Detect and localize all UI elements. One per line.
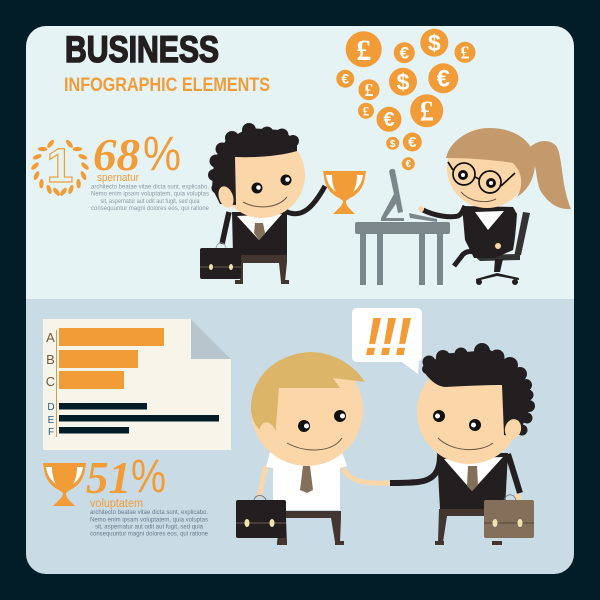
- money coins: €: [383, 109, 395, 131]
- text block: bottom paragraph: architecto beatae vitae dicta sunt, explicabo.: [90, 509, 208, 516]
- money coins: £: [363, 104, 370, 118]
- money coins: €: [437, 66, 450, 92]
- face: [447, 128, 527, 208]
- chair: [514, 212, 530, 257]
- text block: bottom paragraph: [90, 509, 208, 538]
- title: BUSINESS: [65, 29, 219, 70]
- money coins: $: [390, 139, 396, 150]
- panel: bottom blue card: [26, 299, 574, 574]
- mouth: [461, 192, 496, 202]
- category labels: C: [46, 374, 55, 389]
- briefcase: [254, 496, 266, 500]
- bar chart on paper: [43, 319, 231, 450]
- icon: trophy bottom: [43, 463, 86, 506]
- subtitle: INFOGRAPHIC ELEMENTS: [64, 75, 270, 96]
- speech bubble: [352, 307, 422, 374]
- tie: [254, 223, 265, 240]
- eyes: [298, 420, 310, 432]
- trousers: [277, 511, 341, 542]
- stat: 68 percent: %: [143, 128, 181, 181]
- trousers: [240, 255, 287, 282]
- ear: [503, 417, 523, 441]
- icon: laurel wreath with number one: [30, 139, 90, 197]
- money coins: €: [408, 134, 417, 151]
- leg: [454, 251, 484, 266]
- hand and briefcase: [216, 243, 226, 248]
- raised arm: [285, 186, 325, 214]
- typing arm: [423, 206, 465, 217]
- money coins: €: [406, 159, 412, 170]
- bar chart on paper: F: [48, 427, 54, 438]
- trousers: [438, 509, 505, 542]
- text block: top paragraph: Nemo enim ipsam voluptatem, quia voluptas: [91, 191, 209, 198]
- glasses: [448, 162, 515, 193]
- shirt: [444, 457, 503, 491]
- money coins: $: [428, 30, 441, 56]
- mouth: [287, 438, 342, 450]
- label: spernatur: spernatur: [97, 172, 139, 184]
- money coins: £: [420, 96, 434, 128]
- text block: top paragraph: architecto beatae vitae dicta sunt, explicabo.: [91, 184, 209, 190]
- ponytail: [530, 141, 571, 209]
- folded corner: [191, 319, 231, 359]
- speech bubble: !!!: [364, 307, 412, 367]
- right arm: [343, 468, 390, 483]
- text block: bottom paragraph: consequuntur magni dolores eos, qui ratione: [90, 531, 208, 538]
- stat: 51 percent: [86, 449, 166, 503]
- category labels: A: [46, 330, 55, 345]
- left arm: [259, 466, 266, 497]
- ear: [216, 184, 236, 210]
- hair: [251, 352, 365, 438]
- tie: [467, 466, 478, 491]
- shirt: [475, 211, 504, 230]
- icon: laurel wreath with number one: 1: [47, 140, 73, 193]
- eyes: [252, 182, 262, 194]
- money coins: £: [356, 34, 371, 67]
- face: [417, 360, 521, 464]
- orange bars: [59, 328, 164, 346]
- face: [219, 132, 305, 218]
- right arm: [508, 454, 520, 493]
- text block: top paragraph: consequuntur magni dolores eos, qui ratione: [91, 205, 209, 212]
- text block: bottom paragraph: Nemo enim ipsam voluptatem, quia voluptas: [90, 516, 208, 523]
- category labels: B: [46, 352, 55, 367]
- text block: bottom paragraph: sit, aspernatur aut odit aut fugit, sed quia: [95, 523, 203, 530]
- text block: top paragraph: [91, 184, 209, 212]
- dark bars: [59, 403, 147, 410]
- left arm: [222, 212, 229, 244]
- money coins: £: [364, 80, 374, 100]
- jacket: [232, 212, 287, 255]
- handshake arm: [390, 456, 440, 483]
- bar chart on paper: E: [48, 415, 55, 426]
- stat: 68 percent: [93, 128, 181, 181]
- shirt: [237, 214, 282, 240]
- jacket: [437, 453, 508, 509]
- stat: 51 percent: 51: [86, 453, 131, 503]
- hair: [208, 123, 299, 205]
- hand on lap: [495, 243, 501, 249]
- briefcase: [504, 495, 516, 500]
- hair: [422, 343, 535, 437]
- eyes: [458, 170, 468, 180]
- paper: [43, 319, 231, 450]
- figure: curly haired businessman: [390, 343, 535, 545]
- panel: top light card: [26, 26, 574, 299]
- mouth: [438, 438, 493, 450]
- bar chart on paper: D: [47, 402, 55, 413]
- money coins: $: [397, 69, 410, 95]
- figure: blond businessman: [236, 352, 390, 545]
- stat: 68 percent: 68: [93, 130, 140, 180]
- face: [251, 354, 363, 466]
- icon: trophy: [323, 171, 366, 214]
- shirt: [266, 452, 347, 510]
- figure: businessman holding trophy: [200, 123, 325, 284]
- mouth: [243, 197, 287, 207]
- desk with computer: [355, 169, 450, 285]
- eyes: [433, 410, 445, 422]
- money coins: £: [460, 42, 470, 62]
- tie: [300, 466, 313, 493]
- ear: [257, 420, 279, 448]
- stat: 51 percent: %: [131, 449, 166, 502]
- money coins: [336, 29, 476, 170]
- axis: [56, 330, 58, 437]
- figure: businesswoman with glasses: [418, 128, 571, 285]
- money coins: €: [341, 70, 349, 86]
- money coins: €: [400, 44, 410, 62]
- label: voluptatem: voluptatem: [90, 498, 143, 510]
- text block: top paragraph: sit, aspernatur aut odit aut fugit, sed quia: [100, 198, 200, 205]
- jacket: [462, 206, 517, 258]
- category labels: [46, 330, 55, 389]
- hair: [446, 128, 535, 197]
